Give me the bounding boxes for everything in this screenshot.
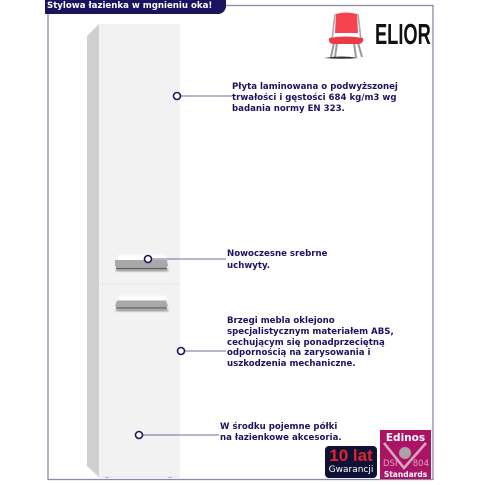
logo: Elior	[324, 12, 431, 59]
badge: Edinos standards: 804	[413, 459, 429, 469]
text: ABS edges: uszkodzenia mechaniczne.	[227, 359, 356, 369]
badge: Edinos standards: Edinos	[386, 432, 425, 444]
badge: 10 year warranty	[325, 446, 377, 478]
text: silver handles: Nowoczesne srebrne	[227, 249, 327, 259]
upper handle	[115, 255, 168, 271]
cabinet	[87, 24, 180, 478]
text: ABS edges: cechującym się ponadprzeciętną	[227, 338, 385, 348]
text: ABS edges	[227, 316, 394, 369]
text: silver handles	[227, 249, 328, 270]
badge: 10 year warranty: Gwarancji	[329, 465, 373, 475]
connector 4	[136, 432, 219, 438]
title banner: Stylowa łazienka w mgnieniu oka!	[47, 1, 212, 11]
badge: Edinos standards	[380, 430, 431, 479]
text: shelves	[220, 422, 342, 443]
frame	[48, 6, 433, 480]
text: shelves: W środku pojemne półki	[220, 422, 337, 432]
text: laminate board: badania normy EN 323.	[232, 104, 345, 114]
badge: 10 year warranty: 10 lat	[329, 446, 373, 465]
connector 2	[144, 256, 226, 262]
text: laminate board: trwałości i gęstości 684 kg/m3 wg	[232, 93, 396, 103]
badge: Edinos standards: Standards	[384, 470, 427, 478]
lower handle	[115, 296, 168, 311]
text: shelves: na łazienkowe akcesoria.	[220, 433, 342, 443]
badge: Edinos standards: DSI	[383, 459, 397, 469]
text: ABS edges: specjalistycznym materiałem ABS,	[227, 327, 394, 337]
text: laminate board	[232, 82, 398, 114]
text: silver handles: uchwyty.	[227, 260, 270, 270]
title banner	[45, 0, 226, 14]
connector 3	[178, 348, 226, 354]
logo wordmark: ELIOR	[375, 19, 431, 51]
text: ABS edges: Brzegi mebla oklejono	[227, 316, 335, 326]
icon: red chair	[324, 12, 364, 59]
connector 1	[174, 92, 232, 100]
text: laminate board: Płyta laminowana o podwyższonej	[232, 82, 398, 92]
text: ABS edges: odpornością na zarysowania i	[227, 348, 370, 358]
